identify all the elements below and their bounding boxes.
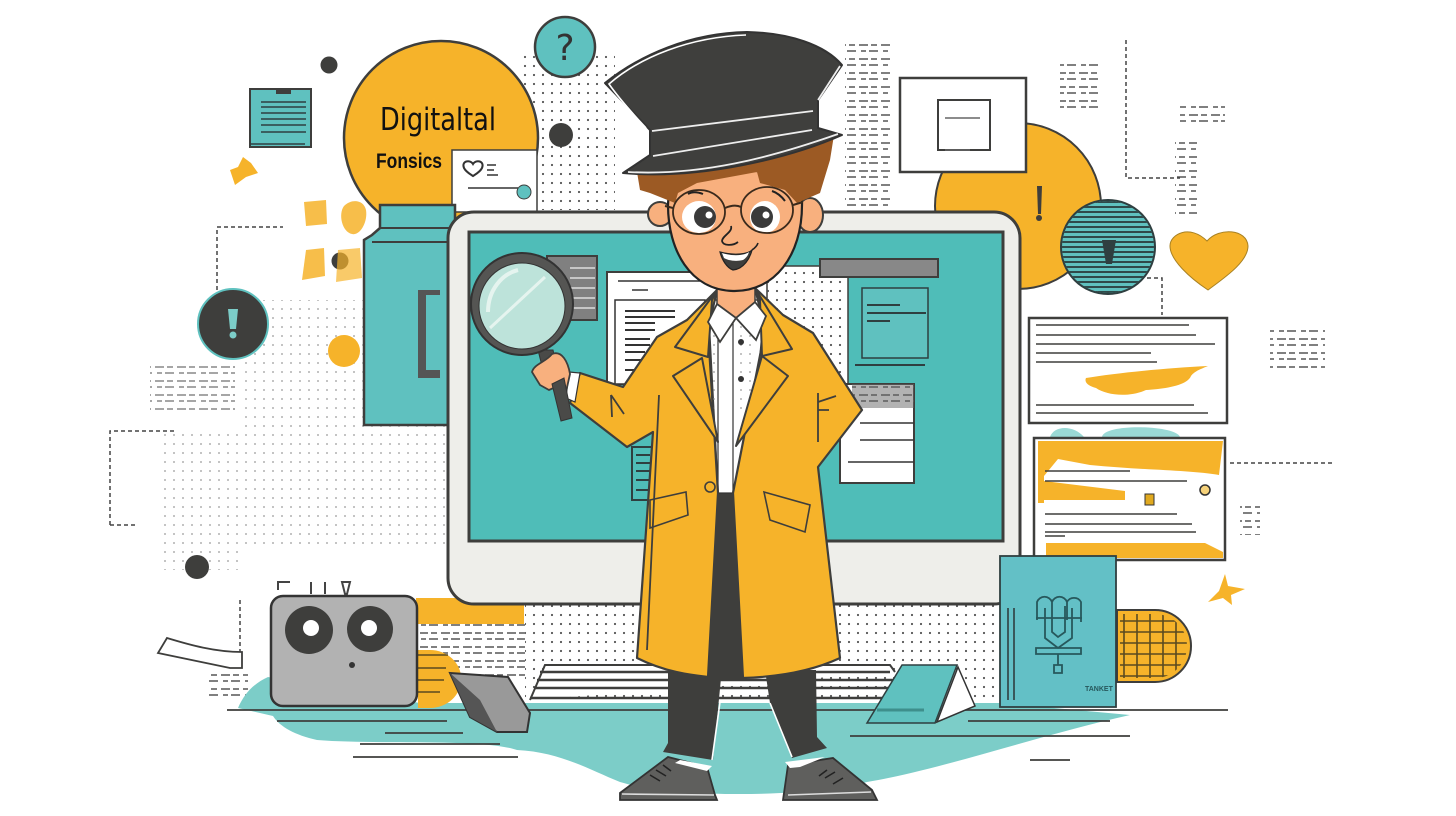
top hat (605, 32, 842, 174)
yellow circle with title (344, 41, 538, 235)
lower window behind coat (632, 384, 914, 500)
note card with heart (452, 150, 537, 212)
dark dots (185, 56, 573, 579)
coat pockets (650, 492, 810, 532)
folder behind monitor (364, 205, 455, 425)
detective character (471, 32, 877, 800)
glasses and eyes (665, 187, 803, 234)
yellow circle right (935, 123, 1101, 289)
question mark badge: ? (555, 28, 575, 69)
hand (532, 353, 570, 392)
ground lines (227, 710, 1228, 760)
yellow heart (1170, 232, 1248, 290)
yellow pill behind speaker (416, 598, 524, 708)
document window on screen (607, 266, 848, 384)
magnifier handle lower part (552, 378, 572, 421)
title: Digitaltal: Digitaltal (380, 102, 496, 138)
teal smudges between cards (1050, 427, 1180, 437)
neck and collar (708, 285, 766, 342)
window behind magnifier (547, 256, 597, 320)
monitor screen (469, 232, 1003, 541)
legs (663, 490, 827, 760)
question mark badge (535, 17, 595, 77)
document card (1029, 318, 1227, 423)
top right framed window (900, 78, 1026, 172)
background dot textures (110, 40, 1335, 705)
nose (722, 226, 738, 245)
coat lapels (673, 288, 792, 446)
yellow smudges (230, 157, 366, 367)
striped teal circle (1061, 200, 1155, 294)
shirt cuff (566, 372, 580, 402)
mouth (720, 243, 758, 270)
eraser block (450, 673, 530, 732)
shoes (620, 757, 877, 800)
teal window right (855, 288, 928, 365)
monitor (448, 212, 1020, 604)
shirt (708, 300, 765, 493)
yellow coat (570, 288, 862, 678)
magnifying glass (471, 253, 573, 382)
grey tab window right (820, 259, 938, 277)
paper on left (158, 638, 242, 668)
monitor stand lines (530, 665, 900, 700)
ears (648, 198, 823, 232)
alert badge left (198, 289, 268, 359)
speaker device (271, 582, 417, 706)
subtitle: Fonsics: Fonsics (376, 150, 442, 173)
ground teal blob (238, 677, 1130, 794)
yellow capsule with grid (1117, 610, 1191, 682)
yellow star (1208, 574, 1245, 605)
notepad icon (250, 89, 311, 147)
face (668, 170, 802, 291)
folded tent card (867, 665, 975, 723)
teal book with icon (1000, 556, 1116, 707)
yellow document card (1034, 438, 1225, 560)
hair (637, 135, 834, 203)
book label: TANKET (1085, 686, 1114, 693)
